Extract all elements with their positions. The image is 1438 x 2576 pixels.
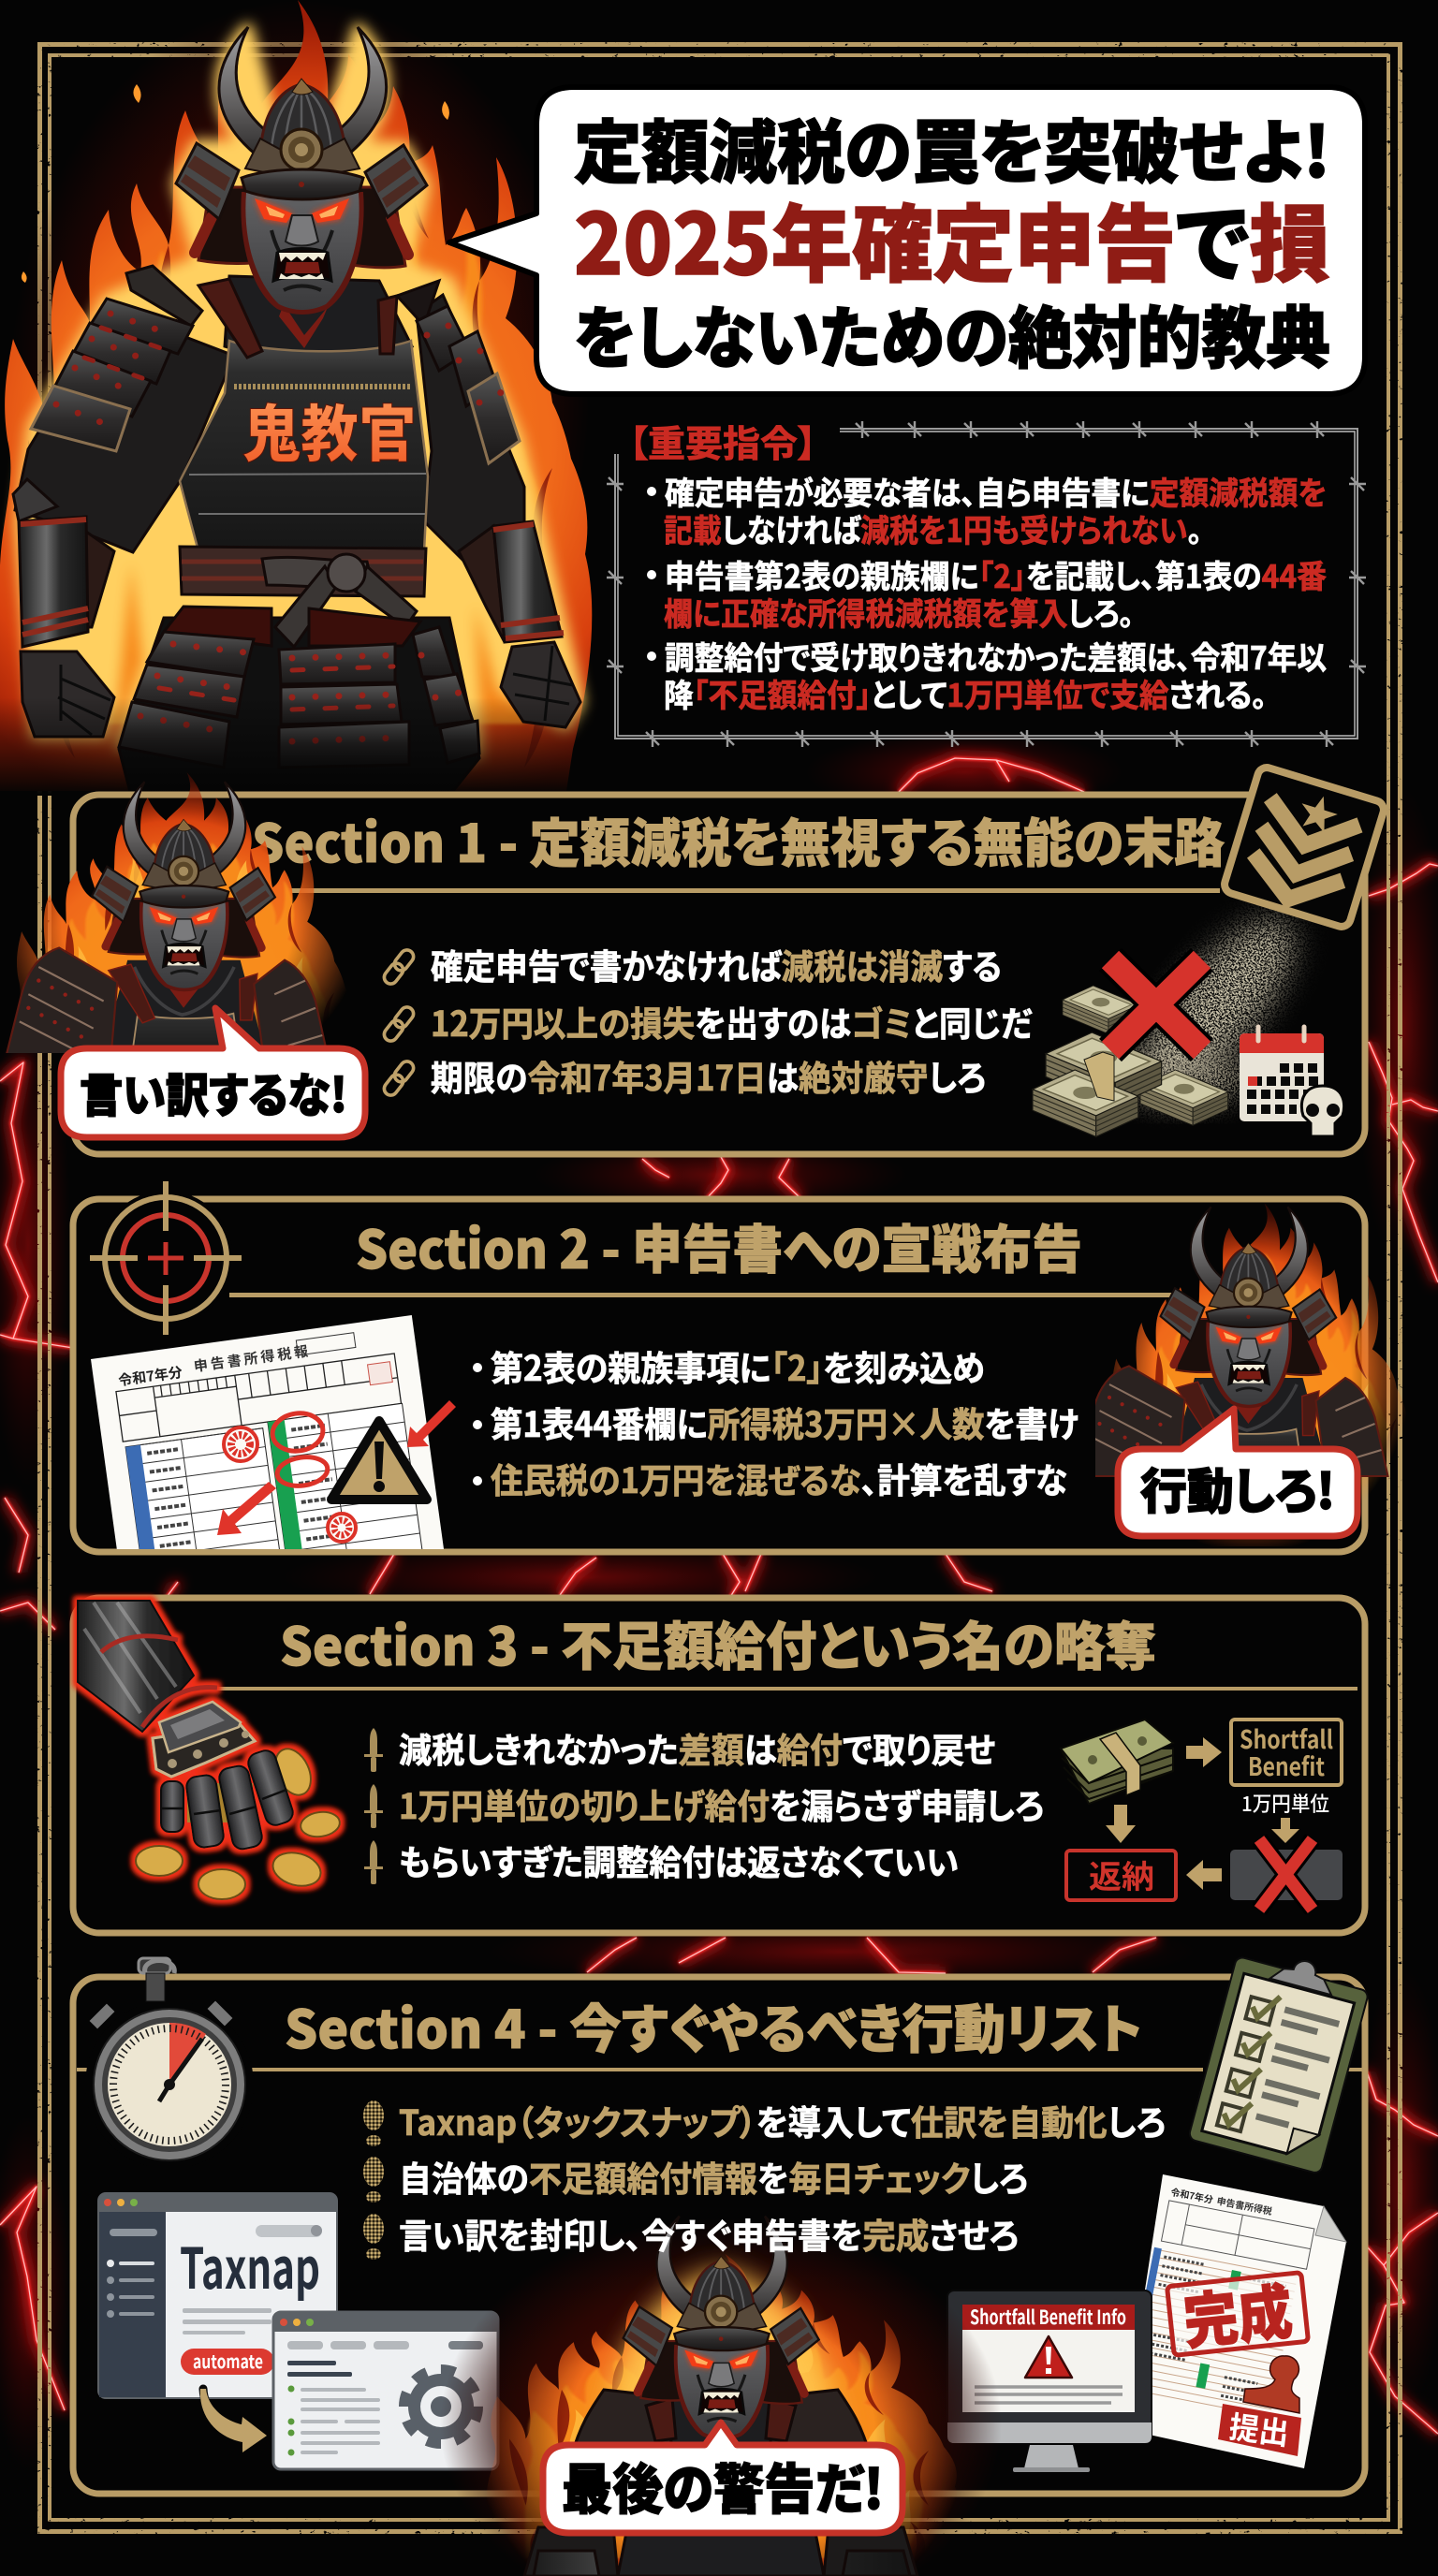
illustration: completed tax document [1123,2174,1346,2468]
samurai 2 with flames [1095,1204,1405,1546]
samurai 1 with flames [6,773,345,1053]
bullets: 1万円単位の切り上げ給付を漏らさず申請しろ [399,1778,1044,1829]
完成 stamp: 完成 [1179,2264,1296,2362]
bullets [473,1340,1078,1503]
barbed wire border [607,421,1366,747]
section 4 bullets: 自治体の不足額給付情報を毎日チェックしろ [399,2151,1028,2202]
box: Shortfall Benefit: Benefit [1248,1747,1325,1783]
callout: 行動しろ: 行動しろ! [1140,1453,1335,1523]
提出 block and hand stamp [1218,2356,1301,2456]
icon: warning triangle [331,1421,427,1500]
panel: section 3 [73,1598,1365,1933]
background lightning [0,730,1438,2471]
icon: crosshair [90,1181,242,1335]
bullet 3: 調整給付で受け取りきれなかった差額は、令和7年以 [665,633,1327,679]
hero forearms and fists [13,479,580,737]
title speech bubble [449,87,1365,394]
header rule [281,888,1220,893]
panel: section 2 [69,1181,1369,1556]
panel: important orders [607,416,1366,747]
bullets: 減税しきれなかった差額は給付で取り戻せ [399,1722,995,1773]
icon: money stacks [1033,986,1228,1136]
panel: section 4 [73,1943,1372,2494]
bullets: もらいすぎた調整給付は返さなくていい [399,1835,959,1885]
icon: dust [1118,899,1316,1114]
panel frame [73,1598,1365,1933]
callout: 言い訳するな: 言い訳するな! [80,1059,347,1126]
callout: 最後の警告だ: 最後の警告だ! [562,2446,884,2525]
illustration: settings window [273,2312,498,2469]
dark box crossed out [1230,1839,1343,1910]
bullet 2: 欄に正確な所得税減税額を算入しろ。 [664,589,1134,635]
panel frame [73,1199,1365,1552]
bullets: 確定申告で書かなければ減税は消滅する [431,939,1002,989]
bullet 2: 申告書第2表の親族欄に「2」を記載し、第1表の44番 [665,551,1327,597]
bullets: 住民税の1万円を混ぜるな、計算を乱すな [491,1453,1067,1503]
gear [406,2372,476,2441]
title line 2: 2025年確定申告で損 [574,177,1330,299]
panel: section 1 [73,766,1386,1154]
header rule [77,2068,1363,2071]
curved arrow [200,2389,267,2452]
illustration: tax form: 令和7年分 [117,1362,183,1390]
bullet 3 [664,633,1327,716]
illustration: Taxnap window: automate [193,2347,263,2374]
icon: clipboard [1188,1943,1372,2174]
icon: rank badge [1223,766,1386,929]
bullet 1: 記載しなければ減税を1円も受けられない。 [664,505,1202,551]
illustration: monitor: Shortfall Benefit Info [970,2303,1126,2331]
callout: 行動しろ [1118,1409,1357,1536]
cash bundle [1061,1720,1173,1804]
heading: Section 4 - 今すぐやるべき行動リスト [285,1988,1142,2064]
flow diagram [1061,1720,1343,1910]
box: Shortfall Benefit: Shortfall [1240,1720,1333,1756]
bullets [382,939,1033,1101]
bullets: 12万円以上の損失を出すのはゴミと同じだ [431,996,1033,1046]
section 4 bullets [363,2095,1166,2260]
warning mark [374,1442,385,1492]
heading: Section 3 - 不足額給付という名の略奪 [280,1605,1156,1681]
hero belt and skirt [119,547,479,768]
box: 返納 [1066,1851,1176,1900]
label: 1万円単位: 1万円単位 [1241,1788,1329,1818]
section 4 bullets: 言い訳を封印し、今すぐ申告書を完成させろ [399,2208,1019,2259]
final samurai with flames [440,2217,1002,2576]
box: 返納: 返納 [1089,1852,1154,1897]
illustration: Taxnap window [97,2192,338,2399]
header rule [215,1687,1357,1690]
red stamps and circles [224,1410,356,1542]
final armor [524,2382,917,2576]
bullets: 期限の令和7年3月17日は絶対厳守しろ [431,1050,986,1101]
label: 鬼教官: 鬼教官 [242,385,417,475]
box: Shortfall Benefit [1231,1720,1342,1785]
提出 block and hand stamp: 提出 [1227,2402,1292,2454]
bullet dots [647,487,656,661]
hero armor body [15,266,524,796]
bullets [364,1722,1044,1885]
title line 3: をしないための絶対的教典 [574,284,1330,382]
heading: 【重要指令】 [629,416,816,468]
illustration: tax form [91,1315,444,1549]
heading: Section 1 - 定額減税を無視する無能の末路 [252,802,1225,878]
panel frame [73,1977,1365,2494]
illustration: completed tax document: 申告書所得税 [1216,2193,1273,2217]
icon: stopwatch [85,1958,254,2169]
bullet 3: 降「不足額給付」として1万円単位で支給される。 [664,670,1267,716]
bullet 1: 確定申告が必要な者は、自ら申告書に定額減税額を [665,468,1327,514]
header rule [229,1293,1175,1297]
bullet 1 [664,468,1327,551]
arrows [1106,1737,1299,1890]
callout: 最後の警告だ [543,2422,902,2533]
callout: 言い訳するな [61,1008,365,1137]
panel frame [73,795,1365,1154]
illustration: Taxnap window: Taxnap [180,2224,320,2305]
red arrows [217,1400,456,1535]
bullet 2 [664,551,1327,635]
illustration: tax form: 申告書所得税報 [193,1340,312,1376]
icon: calendar with skull [1240,1027,1344,1136]
icon: red X [1110,959,1202,1050]
illustration: monitor [947,2291,1152,2472]
illustration: completed tax document: 令和7年分 [1169,2184,1214,2206]
icon: gauntlet and coins [78,1601,342,1899]
bullets: 第1表44番欄に所得税3万円×人数を書け [491,1397,1078,1447]
section 4 bullets: Taxnap（タックスナップ）を導入して仕訳を自動化しろ [399,2095,1166,2145]
hero samurai with flames [0,0,618,796]
title line 1: 定額減税の罠を突破せよ! [574,97,1330,198]
bullets: 第2表の親族事項に「2」を刻み込め [491,1340,985,1391]
heading: Section 2 - 申告書への宣戦布告 [356,1208,1082,1284]
